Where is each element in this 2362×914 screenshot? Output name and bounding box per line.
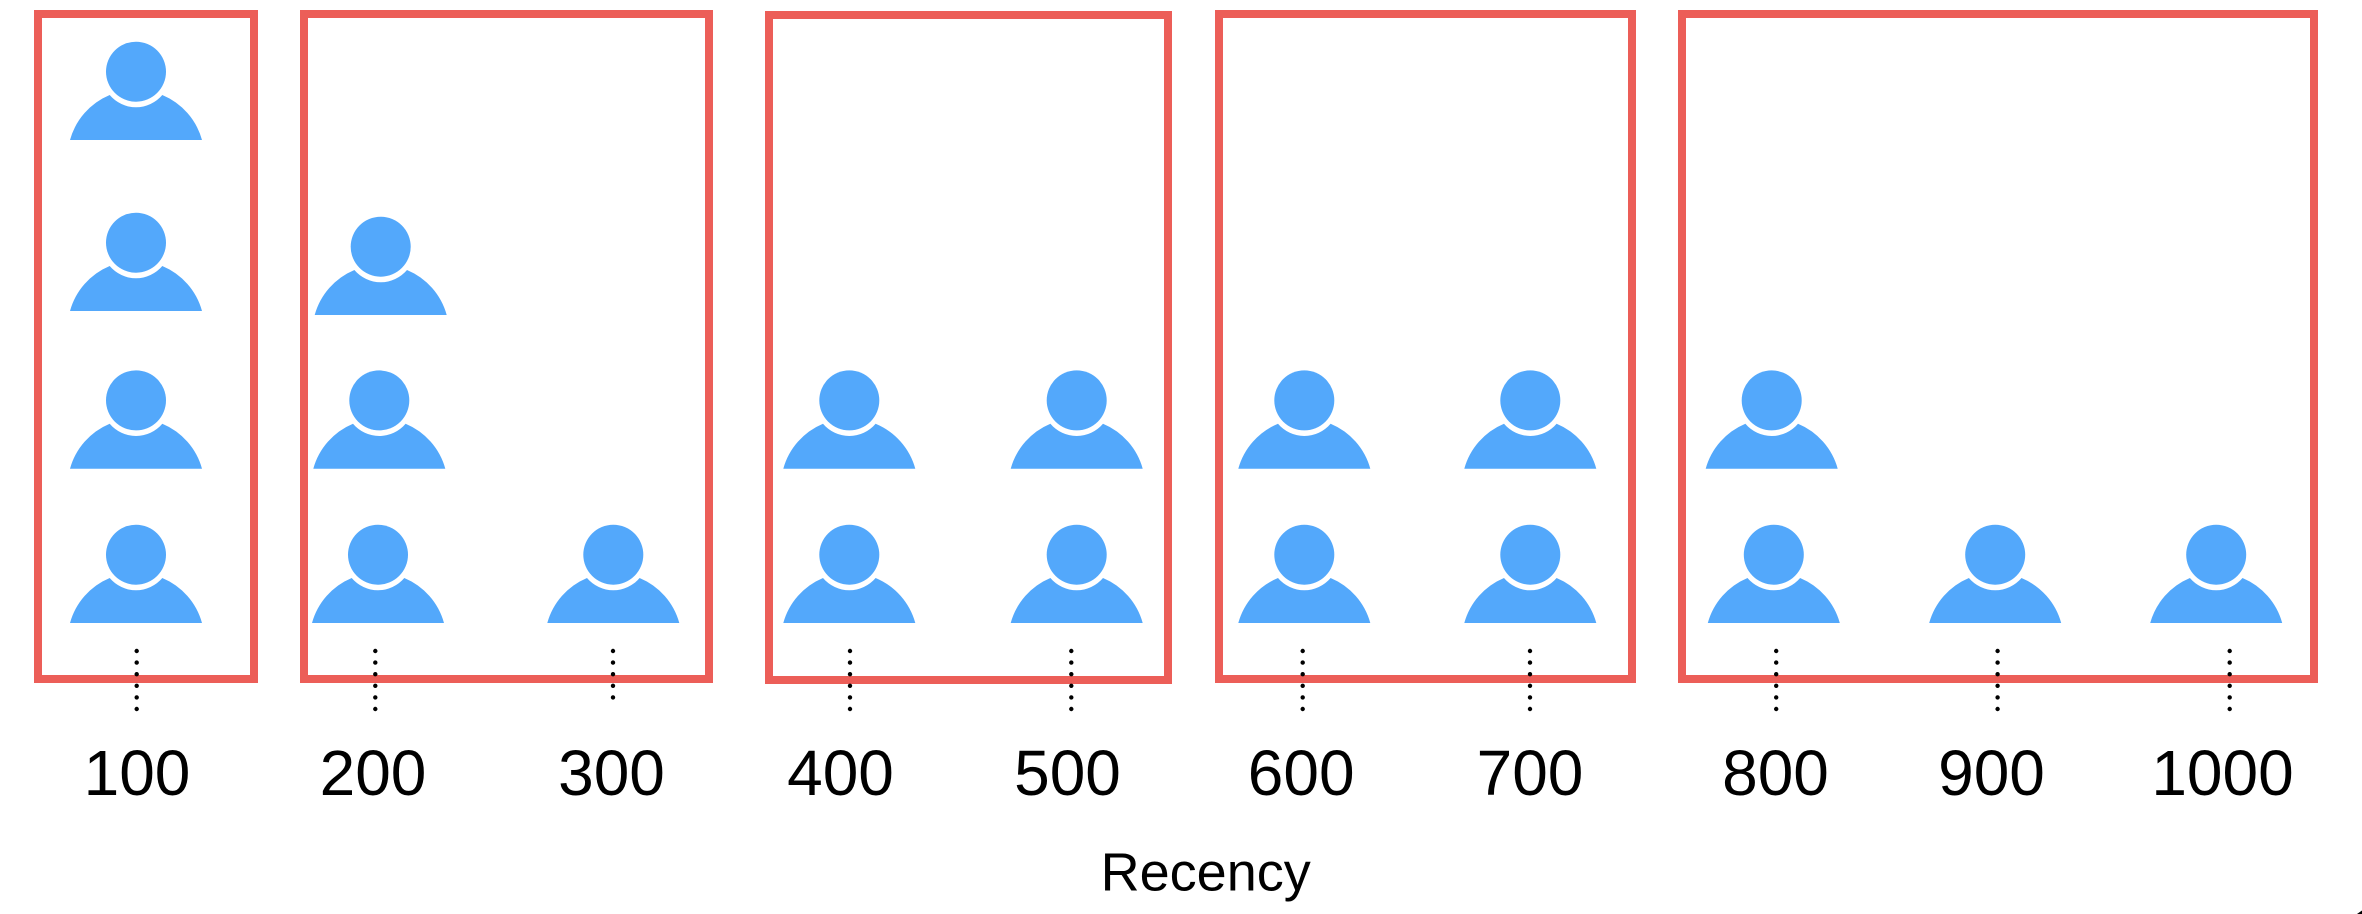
frame: group 200-300 [304,14,709,679]
axis tick labels: 200 [320,737,426,809]
icon: person 100 row 3 [70,213,202,311]
icon: person 700 row 1 [1464,525,1596,623]
axis tick labels: 1000 [2151,737,2294,809]
icon: person 600 row 1 [1238,525,1370,623]
icon: person 800 row 2 [1706,370,1838,469]
axis tick labels: 100 [84,737,190,809]
axis tick labels: 700 [1477,737,1583,809]
axis tick labels: 500 [1014,737,1121,809]
icon: person 800 row 1 [1708,525,1840,623]
icon: person 200 row 3 [315,217,447,315]
panel: group 600-700 [1219,14,1632,679]
icon: person 300 row 1 [547,525,679,623]
icon: person 1000 row 1 [2150,525,2282,623]
frame: group 800-1000 [1682,14,2314,679]
frame: group 400-500 [769,15,1168,680]
panel: group 200-300 [304,14,709,679]
icon: person 400 row 2 [783,370,915,469]
axis tick labels: 900 [1938,737,2045,809]
icon: person 100 row 4 [70,42,202,140]
axis tick labels: 400 [787,737,894,809]
axis title: Recency [1101,842,1311,902]
icon: person 100 row 1 [70,525,202,623]
icon: person 700 row 2 [1464,370,1596,469]
frame: group 600-700 [1219,14,1632,679]
icon: person 600 row 2 [1238,370,1370,469]
axis tick labels: 800 [1722,737,1829,809]
axis tick labels [84,737,2294,809]
axis tick labels: 600 [1248,737,1355,809]
icon: person 100 row 2 [70,370,202,469]
icon: person 200 row 2 [313,370,445,469]
panel: group 800-1000 [1682,14,2314,679]
icon: person 400 row 1 [783,525,915,623]
icon: person 500 row 2 [1011,370,1143,469]
panel: group 400-500 [769,15,1168,680]
dotted tick lines [137,651,2230,710]
icon: person 500 row 1 [1011,525,1143,623]
axis tick labels: 300 [558,737,665,809]
frame: group 100 [38,14,254,679]
icon: person 900 row 1 [1929,525,2061,623]
icon: person 200 row 1 [312,525,444,623]
panel: group 100 [38,14,254,679]
